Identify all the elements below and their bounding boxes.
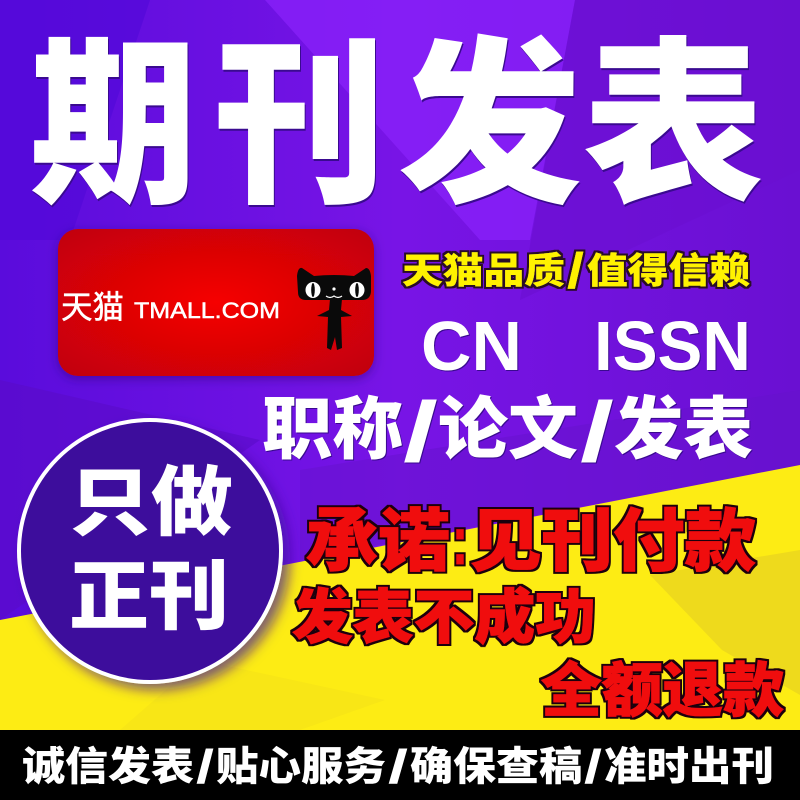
Tmall wordmark: 天猫 [61,289,124,325]
CN ISSN: ISSN [594,307,751,385]
title: 发 [398,26,582,226]
tagline: Tmall quality: / [567,243,584,299]
promise: full refund: 全额退款 [541,658,784,724]
promise: pay after publication: 承诺 [306,504,450,580]
footer text [22,740,774,793]
promise: if publication fails: 发表不成功 [292,585,596,651]
subtitle: / [403,385,438,479]
CN ISSN [421,307,751,385]
icon: Tmall cat [297,268,371,350]
tagline: Tmall quality: 值得信赖 [587,250,750,291]
title: 刊 [214,26,386,226]
promise: pay after publication: 见刊付款 [470,504,756,580]
CN ISSN: CN [421,307,522,385]
badge: only genuine journals [19,420,281,682]
badge text [69,461,233,640]
tagline: Tmall quality [402,243,750,299]
footer text: 贴心服务 [216,745,386,789]
badge text: 只做 [69,461,233,546]
footer text: / [388,740,408,793]
panel: Tmall logo card [58,229,374,376]
footer text: 诚信发表 [22,745,194,789]
title [30,26,764,226]
tagline: Tmall quality: 天猫品质 [402,250,565,291]
badge text: 正刊 [69,555,229,640]
subtitle [262,385,753,479]
title: 表 [583,26,764,226]
subtitle: 职称 [262,392,403,468]
subtitle: / [580,385,614,479]
footer text: 确保查稿 [410,745,582,789]
footer bar [0,730,800,800]
title: 期 [30,26,197,226]
footer text: / [196,740,214,793]
yellow background panel [0,465,800,730]
subtitle: 论文 [438,392,578,468]
footer text: / [584,740,602,793]
promise: pay after publication: : [452,503,468,579]
footer text: 准时出刊 [604,745,774,789]
subtitle: 发表 [614,392,753,468]
promise: pay after publication [306,503,756,580]
Tmall wordmark: TMALL.COM [134,298,280,323]
Tmall wordmark [61,289,280,325]
